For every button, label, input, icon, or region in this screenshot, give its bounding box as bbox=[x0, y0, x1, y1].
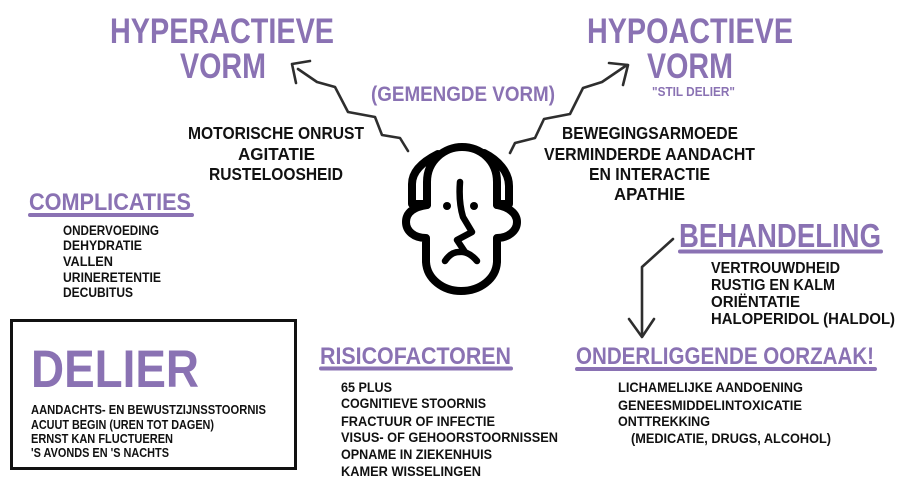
list: underlying causes: GENEESMIDDELINTOXICATIE bbox=[618, 398, 802, 413]
list: risk factors: COGNITIEVE STOORNIS bbox=[341, 396, 486, 411]
list: treatment: VERTROUWDHEID bbox=[711, 260, 840, 277]
list: risk factors: FRACTUUR OF INFECTIE bbox=[341, 414, 495, 429]
list: treatment: ORIËNTATIE bbox=[711, 294, 800, 311]
list: risk factors: 65 PLUS bbox=[341, 380, 392, 395]
heading: hypoactive form bbox=[587, 12, 793, 99]
text block: hypoactive symptoms bbox=[544, 123, 755, 204]
text block: hypoactive symptoms: APATHIE bbox=[614, 184, 685, 204]
list: risk factors: KAMER WISSELINGEN bbox=[341, 464, 481, 479]
list: complications: URINERETENTIE bbox=[63, 270, 161, 285]
list: underlying causes: ONTTREKKING bbox=[618, 414, 710, 429]
heading: hypoactive form: VORM bbox=[647, 47, 733, 86]
panel: underlying cause bbox=[576, 343, 875, 446]
heading: hypoactive form: "STIL DELIER" bbox=[652, 85, 735, 99]
list: treatment bbox=[711, 260, 895, 328]
heading: mixed form: (GEMENGDE VORM) bbox=[371, 83, 555, 106]
panel: complications bbox=[29, 189, 192, 300]
text block: hyperactive symptoms: AGITATIE bbox=[238, 144, 315, 164]
list: risk factors bbox=[341, 380, 558, 479]
panel: delier definition box bbox=[12, 320, 296, 468]
list: complications: DECUBITUS bbox=[63, 285, 133, 300]
list: underlying causes: LICHAMELIJKE AANDOENING bbox=[618, 380, 803, 395]
list: treatment: HALOPERIDOL (HALDOL) bbox=[711, 311, 895, 328]
text block: delier characteristics bbox=[31, 402, 266, 460]
list: underlying causes bbox=[618, 380, 831, 446]
text block: hyperactive symptoms: RUSTELOOSHEID bbox=[209, 164, 343, 184]
list: risk factors: VISUS- OF GEHOORSTOORNISSEN bbox=[341, 430, 558, 445]
text block: hypoactive symptoms: EN INTERACTIE bbox=[589, 164, 710, 184]
panel: treatment bbox=[679, 217, 895, 328]
heading: risk factors: RISICOFACTOREN bbox=[320, 343, 511, 370]
list: complications: VALLEN bbox=[63, 254, 113, 269]
panel: risk factors bbox=[320, 343, 558, 479]
text block: hypoactive symptoms: BEWEGINGSARMOEDE bbox=[562, 123, 738, 143]
list: underlying causes: (MEDICATIE, DRUGS, ALCOHOL) bbox=[631, 431, 831, 446]
heading: hypoactive form: HYPOACTIEVE bbox=[587, 12, 793, 51]
text block: hypoactive symptoms: VERMINDERDE AANDACHT bbox=[544, 144, 755, 164]
text block: delier characteristics: AANDACHTS- EN BEWUSTZIJNSSTOORNIS bbox=[31, 402, 266, 417]
list: complications bbox=[63, 223, 161, 300]
heading: complications: COMPLICATIES bbox=[29, 189, 191, 216]
heading: hyperactive form: VORM bbox=[180, 47, 266, 86]
list: complications: DEHYDRATIE bbox=[63, 238, 142, 253]
text block: delier characteristics: 'S AVONDS EN 'S NACHTS bbox=[31, 445, 169, 460]
list: treatment: RUSTIG EN KALM bbox=[711, 277, 835, 294]
icon: worried face bbox=[406, 147, 517, 291]
text block: delier characteristics: ACUUT BEGIN (UREN TOT DAGEN) bbox=[31, 417, 214, 432]
list: complications: ONDERVOEDING bbox=[63, 223, 159, 238]
heading: delier: DELIER bbox=[31, 340, 199, 399]
text block: hyperactive symptoms bbox=[188, 123, 364, 184]
arrow: face to hyperactive form bbox=[292, 61, 408, 151]
heading: hyperactive form bbox=[110, 12, 334, 86]
heading: hyperactive form: HYPERACTIEVE bbox=[110, 12, 334, 51]
arrow: treatment to underlying cause bbox=[629, 239, 673, 337]
list: risk factors: OPNAME IN ZIEKENHUIS bbox=[341, 447, 492, 462]
arrow: face to hypoactive form bbox=[510, 63, 628, 153]
text block: delier characteristics: ERNST KAN FLUCTUEREN bbox=[31, 431, 173, 446]
text block: hyperactive symptoms: MOTORISCHE ONRUST bbox=[188, 123, 364, 143]
